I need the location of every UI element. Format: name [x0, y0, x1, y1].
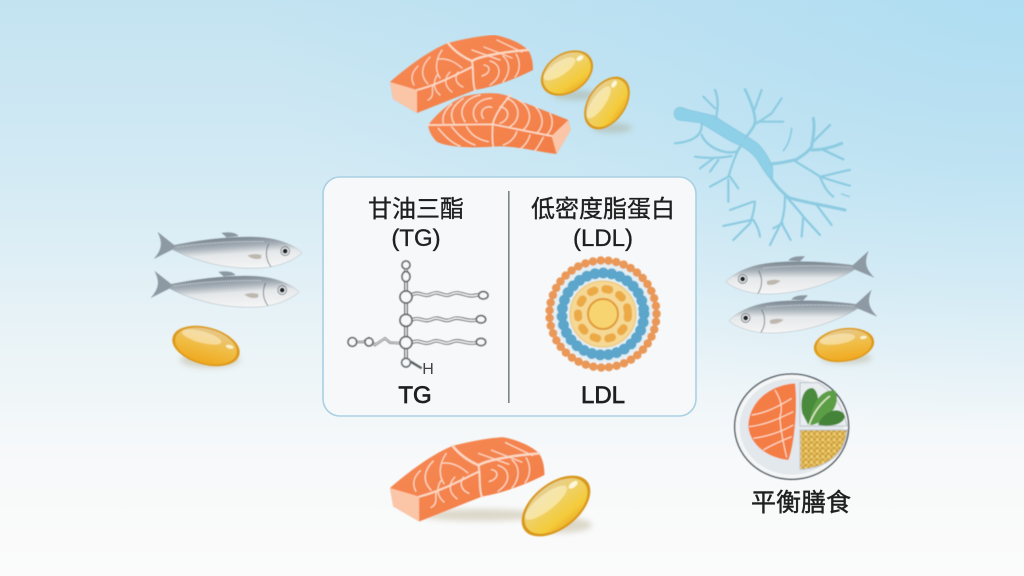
panel: comparison card	[323, 177, 696, 416]
heading: LDL abbreviation: (LDL)	[573, 225, 633, 252]
chart: triglyceride molecule	[348, 261, 488, 368]
illustration: sardines right	[726, 251, 877, 333]
icon: capsule bottom	[513, 465, 599, 547]
label: LDL: LDL	[581, 382, 625, 409]
icon: capsule top 1	[534, 42, 600, 104]
chart: LDL particle	[550, 260, 656, 368]
icon: capsule top 2	[576, 70, 638, 136]
heading: triglyceride: 甘油三酯	[368, 196, 464, 223]
icon: capsule left	[169, 320, 243, 372]
label: TG: TG	[398, 382, 432, 409]
icon: blood vessel branches	[674, 89, 850, 245]
icon: balanced diet plate	[735, 374, 849, 479]
illustration: salmon fillet bottom	[390, 437, 544, 521]
heading: TG abbreviation: (TG)	[391, 225, 441, 252]
heading: low density lipoprotein: 低密度脂蛋白	[531, 196, 675, 223]
icon: capsule right	[813, 325, 875, 365]
illustration: salmon fillets top	[390, 35, 571, 154]
illustrations around the card	[149, 35, 877, 547]
salmon fillet lower	[428, 93, 571, 154]
molecule label H: H	[422, 361, 434, 378]
illustration: sardines left	[149, 222, 303, 314]
label: balanced diet: 平衡膳食	[751, 489, 851, 517]
